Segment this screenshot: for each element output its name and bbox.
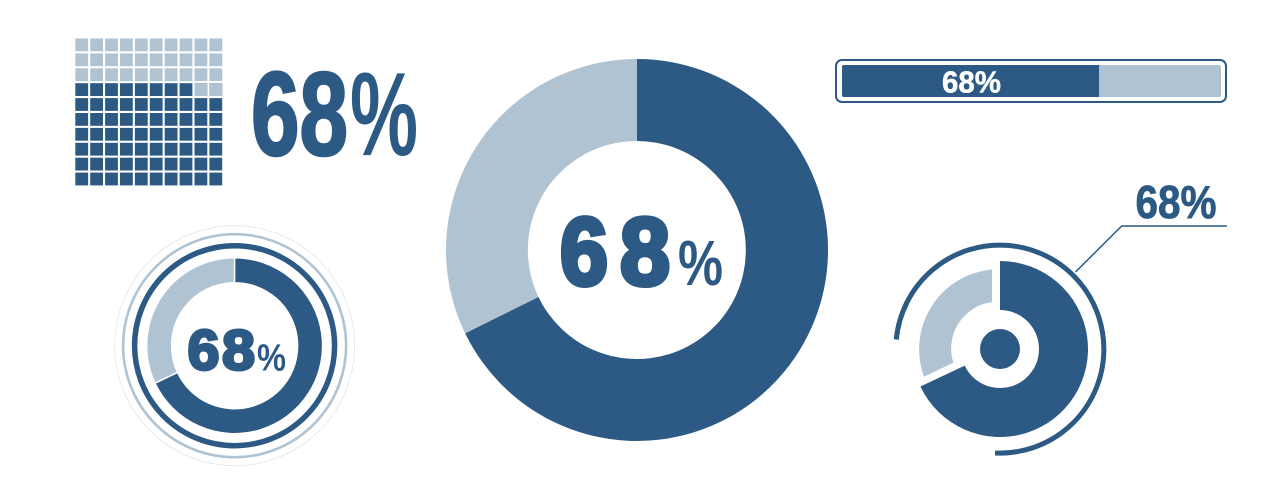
callout value label: 68% <box>1136 176 1216 228</box>
large central donut chart <box>446 59 828 441</box>
ringed donut value label: 6 <box>188 318 220 382</box>
waffle chart: 68 of 100 squares <box>75 38 222 185</box>
waffle value label: % <box>350 48 418 181</box>
ringed donut value label: 8 <box>222 318 255 382</box>
central donut value label <box>560 198 723 306</box>
progress bar value label: 68% <box>942 64 1001 100</box>
waffle value label: 68 <box>251 48 348 181</box>
central donut value label: 6 <box>560 198 608 306</box>
ringed donut chart <box>115 226 355 466</box>
progress bar <box>836 60 1226 102</box>
central donut value label: % <box>678 227 723 299</box>
central donut value label: 8 <box>620 198 670 306</box>
callout donut chart with arc <box>896 245 1104 453</box>
ringed donut value label <box>188 318 286 382</box>
ringed donut value label: % <box>257 338 286 380</box>
leader line to callout label <box>1076 226 1227 272</box>
